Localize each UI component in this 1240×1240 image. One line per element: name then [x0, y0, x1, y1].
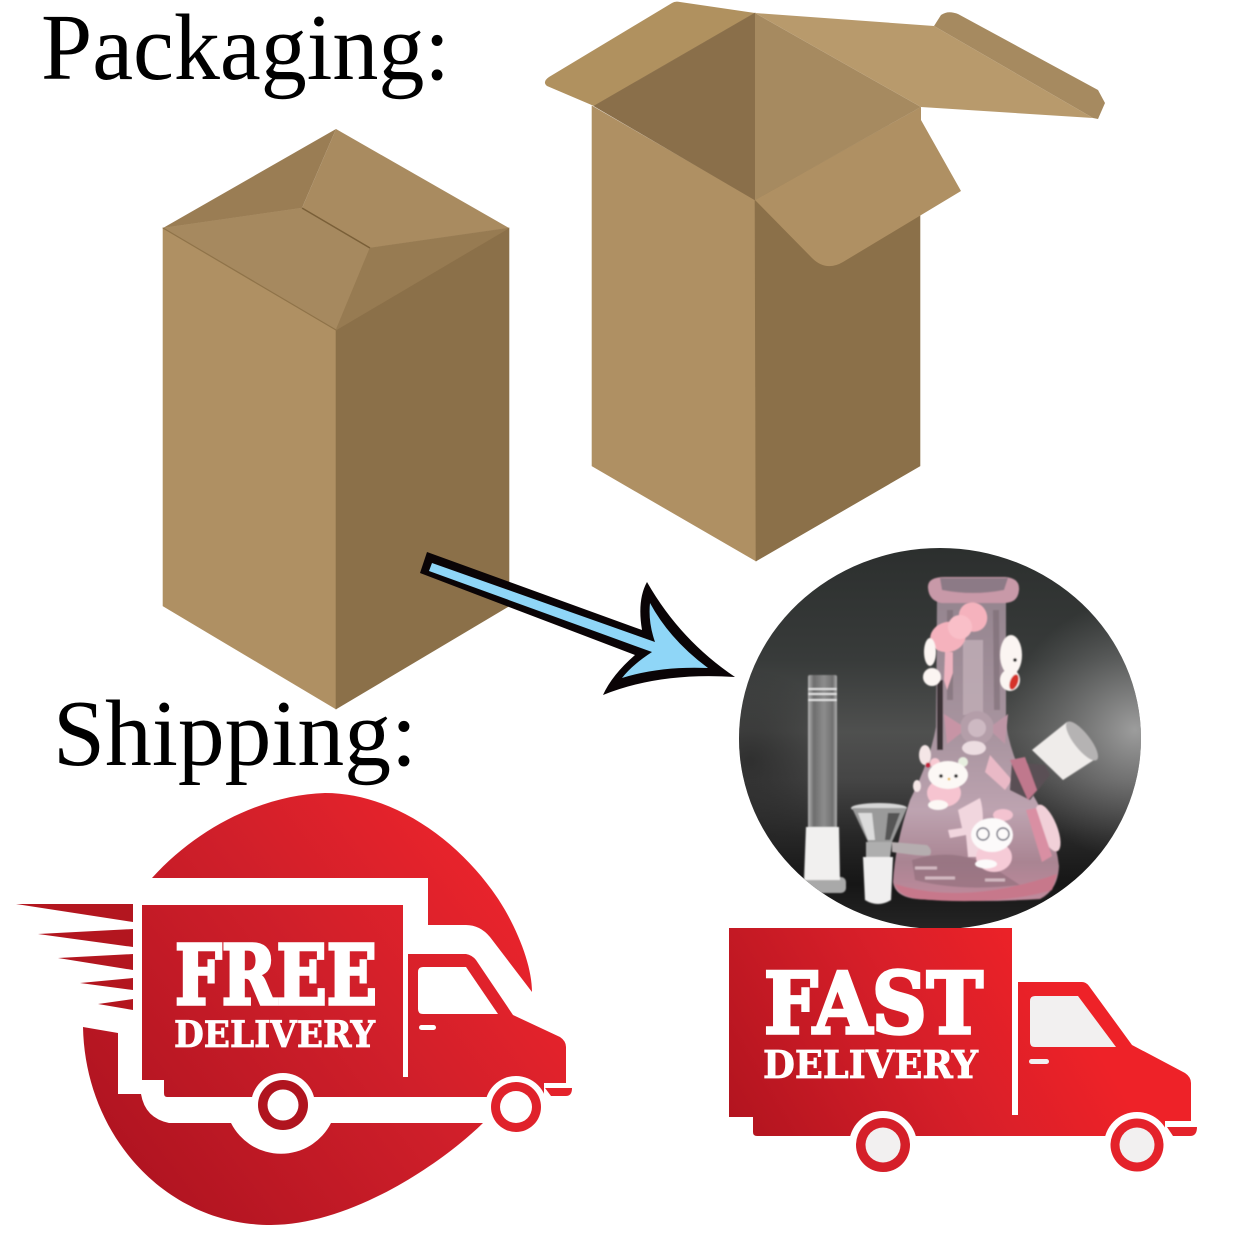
- kitty charm with dress: [913, 745, 968, 810]
- pale pink patches: [948, 755, 1012, 857]
- glass bowl: [851, 803, 931, 904]
- rear wheel: [251, 1073, 315, 1137]
- text: FREE: FREE: [175, 928, 377, 1024]
- pink bow: [929, 602, 988, 690]
- cab window: [1030, 996, 1116, 1047]
- side kitty charms: [923, 635, 1066, 862]
- kitty charm with glasses: [971, 809, 1013, 872]
- downstem: [803, 675, 846, 893]
- door handle: [1029, 1059, 1049, 1064]
- text: DELIVERY: DELIVERY: [763, 1042, 979, 1087]
- text: FAST: FAST: [764, 954, 983, 1053]
- truck body: [142, 905, 566, 1097]
- frosted side joint: [1010, 717, 1103, 800]
- photo background: [730, 540, 1150, 940]
- free delivery badge: [0, 793, 600, 1225]
- product photo: pink glass water pipe in circle: [730, 540, 1150, 940]
- text: DELIVERY: DELIVERY: [174, 1014, 376, 1056]
- door handle: [419, 1025, 436, 1030]
- heading: Shipping: Shipping:: [53, 682, 417, 786]
- closed cardboard box: [163, 129, 509, 709]
- bumper: [545, 1088, 572, 1096]
- fast delivery truck: [729, 928, 1197, 1179]
- truck body: [729, 928, 1191, 1136]
- front wheel: [485, 1076, 547, 1138]
- white truck silhouette: [0, 878, 600, 1154]
- pipe body: [893, 577, 1059, 901]
- speed lines: [16, 904, 133, 1010]
- rear wheel: [849, 1111, 917, 1179]
- candy decoration: [944, 711, 1008, 755]
- arrow pointing to product: [420, 552, 735, 695]
- open cardboard box: [545, 2, 1105, 561]
- red circle backdrop: [83, 793, 532, 1225]
- cab window: [418, 967, 498, 1014]
- front wheel: [1104, 1112, 1170, 1178]
- bumper: [1167, 1127, 1197, 1136]
